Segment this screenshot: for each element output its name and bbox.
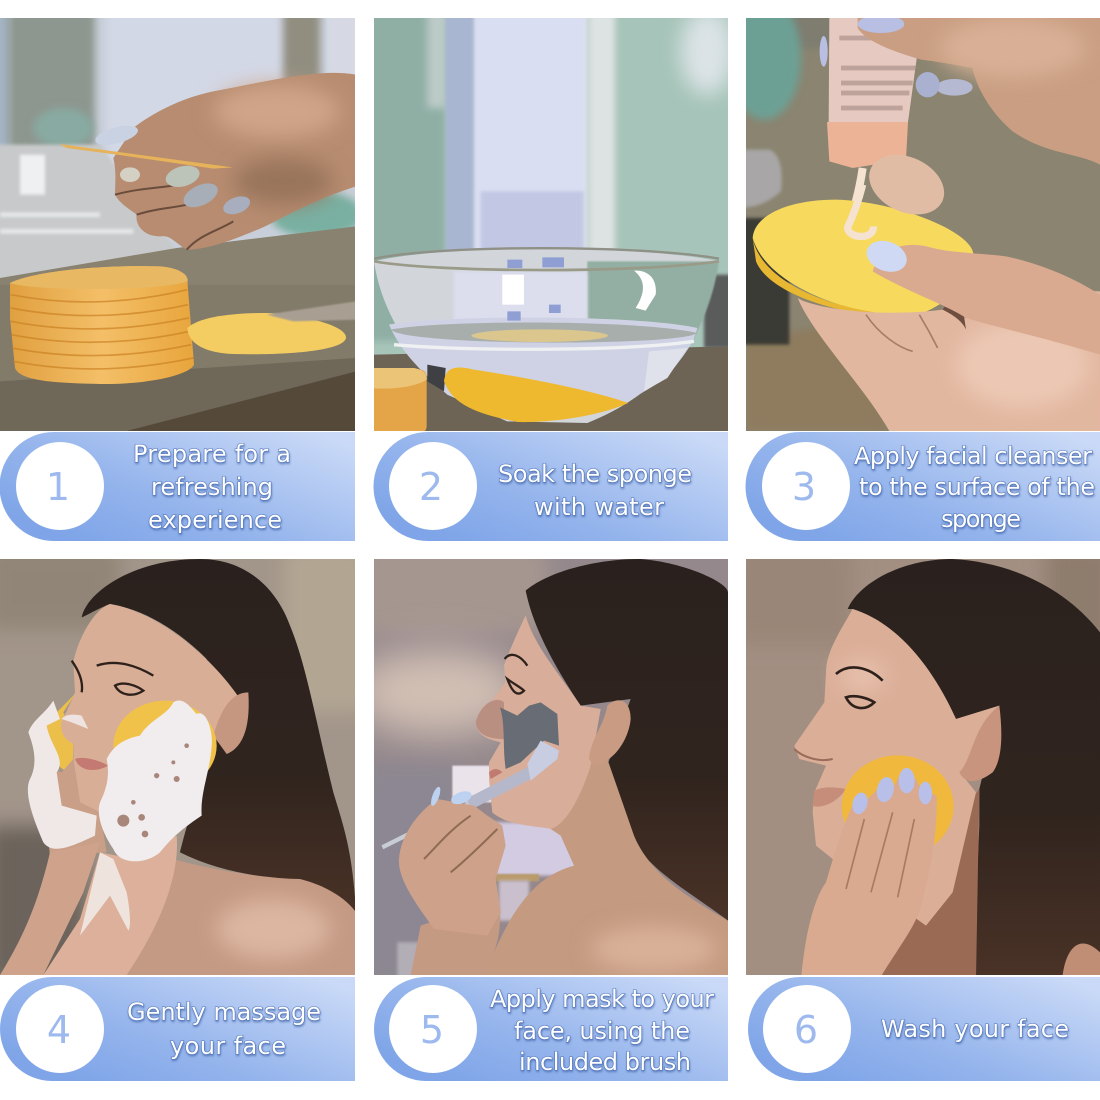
photo: sponge soaking in glass bowl — [364, 8, 734, 433]
photo: woman massaging foam on face — [0, 546, 370, 986]
number badge 5: 5 — [420, 1008, 444, 1052]
neck and shoulders — [117, 859, 356, 975]
caption 1: experience — [148, 506, 282, 534]
caption 3: Apply facial cleanser — [854, 442, 1092, 470]
caption 5: face, using the — [514, 1017, 690, 1045]
number badge 2 — [389, 442, 477, 530]
face profile — [476, 616, 601, 829]
panel: step 6 — [733, 546, 1100, 1081]
hair — [526, 559, 728, 921]
caption 6: Wash your face — [881, 1015, 1069, 1043]
photo: sponge stack and hand — [0, 11, 363, 431]
neck and shoulder — [484, 759, 728, 975]
number badge 1 — [16, 442, 104, 530]
number badge 1: 1 — [46, 465, 70, 509]
neck — [873, 789, 979, 979]
number badge 4: 4 — [47, 1008, 71, 1052]
background lamp and frame — [397, 766, 577, 979]
hand — [59, 73, 356, 250]
number badge 5 — [389, 985, 477, 1073]
shoulder — [1063, 943, 1100, 979]
photo: woman applying clay mask with brush — [374, 559, 728, 975]
banner: step 5 — [374, 977, 728, 1081]
caption 5 — [490, 985, 714, 1076]
caption 2 — [498, 460, 692, 521]
panel: step 4 — [0, 546, 370, 1081]
grey clay mask — [500, 702, 559, 769]
sponge stack — [10, 266, 194, 384]
clear tube lid — [869, 155, 944, 214]
photo: cleanser applied to sponge — [728, 0, 1100, 431]
left hand flesh — [49, 759, 106, 854]
loose sponge on table — [187, 313, 346, 354]
sponges under foam — [113, 700, 217, 771]
caption 2: Soak the sponge — [498, 460, 692, 488]
caption 3: sponge — [941, 505, 1021, 533]
banner: step 6 — [748, 977, 1100, 1081]
caption 1: Prepare for a — [133, 440, 291, 468]
dark jar — [746, 148, 792, 346]
running foam — [80, 852, 130, 936]
panel: step 2 — [364, 8, 734, 541]
number badge 3: 3 — [792, 465, 816, 509]
brush — [382, 741, 559, 847]
foam on right hand — [99, 701, 212, 861]
sponge in water — [444, 367, 628, 422]
yellow sponge — [842, 755, 954, 857]
foam on left hand — [28, 701, 97, 849]
number badge 3 — [762, 442, 850, 530]
banner: step 4 — [0, 977, 355, 1081]
number badge 4 — [16, 985, 104, 1073]
number badge 6 — [763, 985, 851, 1073]
bottom hand — [798, 235, 1100, 431]
ear — [959, 706, 1001, 781]
photo: woman washing face with sponge — [733, 546, 1100, 979]
caption 3: to the surface of the — [859, 473, 1095, 501]
yellow sponge — [753, 185, 973, 316]
hair — [848, 559, 1100, 979]
banner: step 2 — [373, 432, 728, 541]
small sponge stack at edge — [371, 368, 427, 433]
caption 4: Gently massage — [127, 998, 321, 1026]
caption 2: with water — [534, 493, 664, 521]
caption 4: your face — [170, 1032, 286, 1060]
number badge 6: 6 — [794, 1008, 818, 1052]
panel: step 5 — [351, 546, 728, 1081]
banner: step 3 — [746, 432, 1100, 541]
hand — [399, 786, 506, 975]
face — [62, 604, 240, 812]
face — [794, 609, 999, 926]
caption 5: Apply mask to your — [490, 985, 714, 1013]
hand — [801, 768, 937, 979]
arms — [0, 853, 96, 975]
ear — [589, 700, 631, 766]
cleanser tube — [827, 18, 917, 201]
caption 4 — [127, 998, 321, 1060]
glass bowl — [374, 248, 719, 423]
caption 1: refreshing — [151, 473, 273, 501]
hair — [82, 559, 356, 916]
number badge 2: 2 — [419, 465, 443, 509]
panel: step 3 — [728, 0, 1100, 541]
panel: step 1 — [0, 11, 363, 541]
banner: step 1 — [0, 432, 355, 541]
caption 5: included brush — [519, 1048, 691, 1076]
ear — [213, 692, 249, 754]
top hand — [820, 15, 1100, 165]
caption 1 — [133, 440, 291, 534]
caption 3 — [854, 442, 1095, 533]
